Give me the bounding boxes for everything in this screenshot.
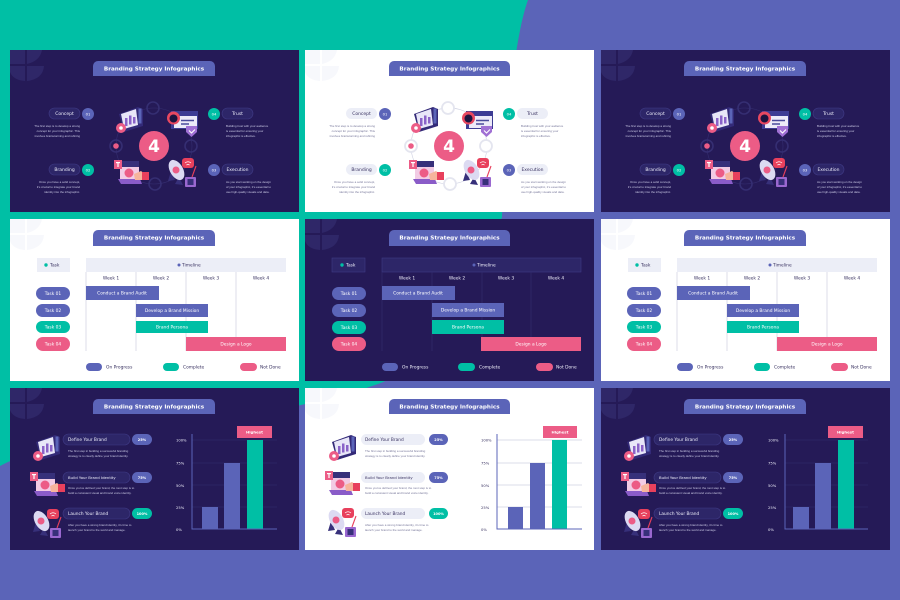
gantt chart: Design a Logo <box>811 342 843 348</box>
heading <box>389 399 510 414</box>
item: build your brand identity: build a consistent visual and brand voice identity. <box>68 491 132 495</box>
item: concept: 01 <box>86 112 90 116</box>
item: define your brand: 25% <box>729 438 738 442</box>
gantt chart: Timeline <box>772 262 792 268</box>
panel: progress chart dark left <box>10 388 299 550</box>
gantt chart: Brand Persona <box>747 324 779 330</box>
item: branding <box>628 164 685 194</box>
gantt chart: Week 2 <box>153 276 169 282</box>
gantt chart: Conduct a Brand Audit <box>688 290 738 296</box>
item: concept: 01 <box>677 112 681 116</box>
cycle diagram: 4 <box>443 137 455 157</box>
cycle diagram: 4 <box>148 137 160 157</box>
item: define your brand: The first step in building a successful branding <box>365 449 426 453</box>
item: concept <box>34 108 94 138</box>
item: branding <box>37 164 94 194</box>
item: launch your brand: After you have a strong brand identity, it's time to <box>365 523 429 527</box>
gantt chart: Design a Logo <box>515 342 547 348</box>
panel: timeline light right <box>601 219 890 381</box>
gantt chart <box>332 258 581 351</box>
item: branding: it's crucial to integrate your brand <box>628 185 671 189</box>
gantt chart: Conduct a Brand Audit <box>393 290 443 296</box>
item: build your brand identity: Build Your Brand Identity <box>68 475 116 480</box>
heading <box>93 230 215 246</box>
item: define your brand <box>624 434 743 461</box>
item: execution: 03 <box>507 168 512 172</box>
item: define your brand: Define Your Brand <box>659 437 698 443</box>
bar chart: 50% <box>176 484 185 488</box>
item: trust: is essential for ensuring your <box>817 129 854 133</box>
item: execution: of your infographic, it's essential to <box>817 185 862 189</box>
item: define your brand <box>33 434 152 461</box>
item: build your brand identity: 75% <box>729 476 738 480</box>
item: trust <box>503 108 564 138</box>
bar chart: 25% <box>481 506 490 510</box>
item: define your brand: strategy is to clearly define your brand identity. <box>659 454 720 458</box>
bar chart: 100% <box>481 438 492 442</box>
legend: Complete <box>183 364 204 370</box>
item: execution: use high-quality visuals and data. <box>226 190 270 194</box>
gantt chart: Conduct a Brand Audit <box>97 290 147 296</box>
bar chart: 75% <box>176 462 185 466</box>
panel: concept cycle dark left <box>10 50 299 212</box>
item: execution: 03 <box>803 168 808 172</box>
item: execution: As you start working on the design <box>521 180 566 184</box>
bar chart: 100% <box>768 438 779 442</box>
panel: progress chart dark right <box>601 388 890 550</box>
item: concept: 01 <box>383 112 387 116</box>
bar chart: Highest <box>246 430 263 434</box>
legend <box>677 363 872 371</box>
item: trust: infographic is effective. <box>521 134 551 138</box>
item: build your brand identity <box>30 472 152 496</box>
legend: Complete <box>774 364 795 370</box>
item: define your brand <box>329 434 448 461</box>
item: build your brand identity: 75% <box>138 476 147 480</box>
gantt chart: Task 02 <box>340 308 357 314</box>
heading: Branding Strategy Infographics <box>104 66 205 72</box>
panel: concept cycle dark right <box>601 50 890 212</box>
gantt chart: Task <box>345 262 356 268</box>
gantt chart: Timeline <box>476 262 496 268</box>
item: trust: 04 <box>212 112 217 116</box>
gantt chart: Develop a Brand Mission <box>145 308 199 314</box>
legend: On Progress <box>402 364 429 370</box>
item: trust: Building trust with your audience <box>521 124 564 128</box>
item: trust: Trust <box>526 111 538 117</box>
item: define your brand: Define Your Brand <box>68 437 107 443</box>
bar chart <box>176 426 277 532</box>
item: build your brand identity <box>325 471 448 495</box>
heading: Branding Strategy Infographics <box>695 66 796 72</box>
item: launch your brand: 100% <box>728 512 739 516</box>
item: launch your brand: 100% <box>433 512 444 516</box>
item: execution: of your infographic, it's essential to <box>521 185 566 189</box>
gantt chart <box>36 258 286 351</box>
panel: timeline dark center <box>305 219 594 381</box>
item: branding: 02 <box>86 168 90 172</box>
gantt chart: Task 01 <box>44 291 61 297</box>
heading <box>93 61 215 76</box>
cycle diagram <box>405 102 493 190</box>
gantt chart: Week 4 <box>844 276 860 282</box>
item: define your brand: Define Your Brand <box>365 437 404 443</box>
legend: Not Done <box>260 364 281 370</box>
item: launch your brand: After you have a strong brand identity, it's time to <box>659 523 723 527</box>
bar chart: Highest <box>837 430 854 434</box>
item: build your brand identity: Build Your Brand Identity <box>659 475 707 480</box>
item: trust <box>799 108 860 138</box>
item: build your brand identity: build a consistent visual and brand voice identity. <box>365 491 429 495</box>
item: launch your brand: Launch Your Brand <box>659 511 700 517</box>
item: build your brand identity: 75% <box>434 476 443 480</box>
gantt chart: Task 02 <box>635 308 652 314</box>
bar chart <box>768 426 868 532</box>
item: concept: concept for your infographic. This <box>628 129 672 133</box>
bar chart <box>481 426 582 532</box>
heading <box>389 61 510 76</box>
bar chart: Highest <box>552 430 569 434</box>
gantt chart: Task 01 <box>340 291 357 297</box>
gantt chart: Week 1 <box>694 276 710 282</box>
item: concept: Concept <box>646 111 665 117</box>
legend <box>382 363 577 371</box>
item: trust: infographic is effective. <box>226 134 256 138</box>
item: branding: 02 <box>383 168 387 172</box>
item: execution: As you start working on the design <box>226 180 271 184</box>
item: launch your brand: launch your brand to the world and manage. <box>365 528 423 532</box>
bar chart: 75% <box>768 462 777 466</box>
item: trust: is essential for ensuring your <box>226 129 263 133</box>
item: branding: 02 <box>677 168 681 172</box>
item: execution: use high-quality visuals and data. <box>817 190 861 194</box>
gantt chart: Week 2 <box>449 276 465 282</box>
item: execution: of your infographic, it's essential to <box>226 185 271 189</box>
gantt chart: Week 4 <box>253 276 269 282</box>
heading: Branding Strategy Infographics <box>104 404 205 410</box>
gantt chart: Task 03 <box>635 324 652 330</box>
item: branding: identity into the infographic. <box>635 190 671 194</box>
panel: concept cycle light center <box>305 50 594 212</box>
item: build your brand identity: Once you've defined your brand, the next step is to <box>68 486 135 490</box>
item: define your brand: 25% <box>138 438 147 442</box>
item: branding: Once you have a solid concept, <box>39 180 80 184</box>
bar chart: 0% <box>768 528 774 532</box>
gantt chart: Task 02 <box>44 308 61 314</box>
heading <box>684 230 806 246</box>
cycle diagram <box>701 102 789 190</box>
item: branding: identity into the infographic. <box>339 190 375 194</box>
item: branding: Once you have a solid concept, <box>630 180 671 184</box>
bar chart: 50% <box>481 484 490 488</box>
item: concept: involves brainstorming and refining <box>35 134 80 138</box>
gantt chart: Task <box>49 262 60 268</box>
item: execution <box>208 164 271 194</box>
item: define your brand: strategy is to clearly define your brand identity. <box>365 454 426 458</box>
legend: Complete <box>479 364 500 370</box>
item: launch your brand: After you have a strong brand identity, it's time to <box>68 523 132 527</box>
item: execution: 03 <box>212 168 217 172</box>
heading: Branding Strategy Infographics <box>104 236 205 242</box>
item: concept <box>625 108 685 138</box>
bar chart: 25% <box>176 506 185 510</box>
item: branding: Branding <box>54 167 75 173</box>
item: define your brand: The first step in building a successful branding <box>659 449 720 453</box>
item: concept: Concept <box>352 111 371 117</box>
item: build your brand identity: build a consistent visual and brand voice identity. <box>659 491 723 495</box>
item: define your brand: strategy is to clearly define your brand identity. <box>68 454 129 458</box>
gantt chart: Task 04 <box>635 342 652 348</box>
bar chart: 0% <box>176 528 182 532</box>
legend: On Progress <box>697 364 724 370</box>
bar chart: 50% <box>768 484 777 488</box>
item: trust <box>208 108 269 138</box>
item: concept: concept for your infographic. This <box>37 129 81 133</box>
item: branding <box>332 164 391 194</box>
item: concept: The first step is to develop a strong <box>34 124 80 128</box>
item: trust: Trust <box>822 111 834 117</box>
heading <box>684 399 806 414</box>
item: branding: identity into the infographic. <box>44 190 80 194</box>
item: trust: infographic is effective. <box>817 134 847 138</box>
panel: timeline light left <box>10 219 299 381</box>
gantt chart: Week 3 <box>498 276 514 282</box>
item: concept: concept for your infographic. This <box>332 129 376 133</box>
item: execution: Execution <box>521 167 544 173</box>
panel: progress chart light center <box>305 388 594 550</box>
gantt chart: Week 3 <box>203 276 219 282</box>
item: build your brand identity: Once you've defined your brand, the next step is to <box>659 486 726 490</box>
item: concept <box>329 108 391 138</box>
item: trust: Trust <box>231 111 243 117</box>
bar chart: 25% <box>768 506 777 510</box>
bar chart: 100% <box>176 438 187 442</box>
item: trust: Building trust with your audience <box>226 124 269 128</box>
legend: On Progress <box>106 364 133 370</box>
item: launch your brand: launch your brand to the world and manage. <box>659 528 717 532</box>
item: concept: involves brainstorming and refining <box>626 134 671 138</box>
item: launch your brand: Launch Your Brand <box>365 511 406 517</box>
heading: Branding Strategy Infographics <box>695 404 796 410</box>
heading: Branding Strategy Infographics <box>399 404 500 410</box>
item: branding: it's crucial to integrate your brand <box>332 185 375 189</box>
item: execution: Execution <box>226 167 249 173</box>
gantt chart: Develop a Brand Mission <box>736 308 790 314</box>
gantt chart: Brand Persona <box>452 324 484 330</box>
heading: Branding Strategy Infographics <box>695 236 796 242</box>
gantt chart: Brand Persona <box>156 324 188 330</box>
heading <box>389 230 510 246</box>
legend <box>86 363 281 371</box>
heading: Branding Strategy Infographics <box>399 66 500 72</box>
item: trust: 04 <box>803 112 808 116</box>
gantt chart: Week 2 <box>744 276 760 282</box>
item: branding: it's crucial to integrate your brand <box>37 185 80 189</box>
item: branding: Branding <box>351 167 372 173</box>
item: launch your brand: 100% <box>137 512 148 516</box>
item: concept: The first step is to develop a strong <box>625 124 671 128</box>
item: trust: Building trust with your audience <box>817 124 860 128</box>
gantt chart: Week 3 <box>794 276 810 282</box>
item: concept: The first step is to develop a strong <box>329 124 375 128</box>
cycle diagram <box>110 102 198 190</box>
background: teal blob <box>0 0 528 466</box>
item: define your brand: The first step in building a successful branding <box>68 449 129 453</box>
heading: Branding Strategy Infographics <box>399 236 500 242</box>
gantt chart: Task 03 <box>340 325 357 331</box>
item: launch your brand: Launch Your Brand <box>68 511 109 517</box>
item: launch your brand <box>325 507 448 537</box>
item: launch your brand: launch your brand to the world and manage. <box>68 528 126 532</box>
gantt chart <box>627 258 877 351</box>
item: execution: As you start working on the design <box>817 180 862 184</box>
gantt chart: Timeline <box>181 262 201 268</box>
item: branding: Branding <box>645 167 666 173</box>
item: execution <box>799 164 862 194</box>
gantt chart: Week 4 <box>548 276 564 282</box>
bar chart: 0% <box>481 528 487 532</box>
gantt chart: Task 04 <box>340 342 357 348</box>
item: build your brand identity: Once you've defined your brand, the next step is to <box>365 486 432 490</box>
gantt chart: Design a Logo <box>220 342 252 348</box>
item: concept: Concept <box>55 111 74 117</box>
gantt chart: Task <box>640 262 651 268</box>
item: trust: is essential for ensuring your <box>521 129 558 133</box>
gantt chart: Develop a Brand Mission <box>441 308 495 314</box>
gantt chart: Task 04 <box>44 342 61 348</box>
heading <box>684 61 806 76</box>
item: launch your brand <box>621 508 743 538</box>
heading <box>93 399 215 414</box>
legend: Not Done <box>851 364 872 370</box>
item: execution <box>503 164 566 194</box>
item: trust: 04 <box>507 112 512 116</box>
gantt chart: Task 01 <box>635 291 652 297</box>
item: execution: Execution <box>817 167 840 173</box>
item: launch your brand <box>30 508 152 538</box>
item: concept: involves brainstorming and refining <box>330 134 375 138</box>
item: define your brand: 25% <box>434 438 443 442</box>
item: build your brand identity <box>621 472 743 496</box>
item: branding: Once you have a solid concept, <box>334 180 375 184</box>
item: build your brand identity: Build Your Brand Identity <box>365 475 413 480</box>
gantt chart: Week 1 <box>399 276 415 282</box>
gantt chart: Week 1 <box>103 276 119 282</box>
legend: Not Done <box>556 364 577 370</box>
gantt chart: Task 03 <box>44 324 61 330</box>
item: execution: use high-quality visuals and data. <box>521 190 565 194</box>
cycle diagram: 4 <box>739 137 751 157</box>
bar chart: 75% <box>481 462 490 466</box>
